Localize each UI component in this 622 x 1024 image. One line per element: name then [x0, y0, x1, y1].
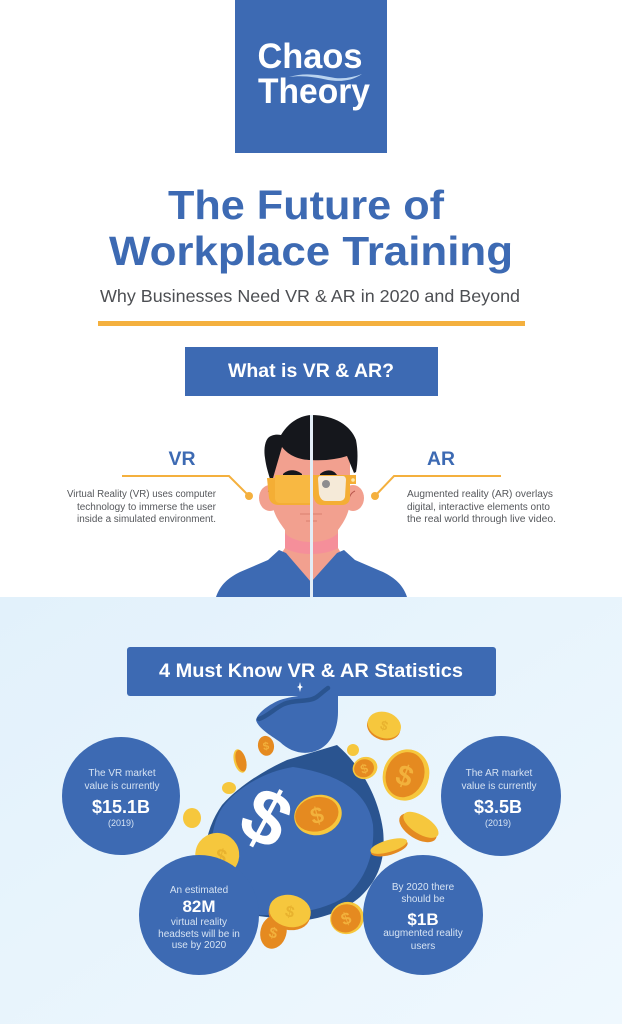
- coins: [183, 707, 443, 952]
- title: Workplace Training: [109, 228, 513, 274]
- coin: $: [339, 908, 354, 929]
- bag knot: [256, 690, 338, 753]
- coin: [290, 789, 346, 841]
- stat: 82M headsets: 82M: [182, 897, 216, 916]
- logo block: [235, 0, 387, 153]
- AR glasses: [311, 475, 356, 505]
- VR explanation: inside a simulated environment.: [77, 514, 216, 525]
- section heading: statistics: 4 Must Know VR & AR Statistics: [159, 661, 463, 682]
- face: [272, 445, 350, 530]
- VR explanation: VR: [168, 449, 196, 470]
- lower statistics background: [0, 597, 622, 1024]
- section heading: statistics: [127, 647, 496, 696]
- coin: $: [267, 924, 280, 943]
- VR headset: [267, 478, 311, 505]
- AR explanation: digital, interactive elements onto: [407, 502, 550, 513]
- money bag illustration: [205, 690, 384, 921]
- VR explanation: technology to immerse the user: [77, 502, 217, 513]
- coin: $: [213, 845, 229, 869]
- coin: $: [307, 801, 327, 829]
- bag tie: [259, 688, 328, 719]
- stat: 82M headsets: An estimated: [170, 885, 228, 896]
- VR explanation: Virtual Reality (VR) uses computer: [67, 489, 217, 500]
- stat: VR market value: [62, 737, 180, 855]
- coin: [266, 891, 314, 934]
- stat: 1B AR users: augmented reality: [383, 928, 463, 939]
- coin: $: [284, 903, 296, 922]
- stat: 82M headsets: use by 2020: [172, 940, 227, 951]
- coin: [369, 835, 409, 860]
- stat: 1B AR users: [363, 855, 483, 975]
- stat: AR market value: [441, 736, 561, 856]
- brows: [283, 470, 302, 476]
- illustration: man with VR and AR glasses: [216, 415, 407, 597]
- hair: [264, 415, 358, 479]
- coin: $: [358, 760, 371, 777]
- coin: [347, 744, 359, 756]
- VR explanation: [67, 449, 253, 525]
- coin behind bag: [222, 782, 236, 794]
- stat: 1B AR users: should be: [401, 894, 445, 905]
- logo block: Theory: [258, 72, 370, 111]
- nose and mouth: [300, 514, 322, 521]
- subtitle: Why Businesses Need VR & AR in 2020 and Beyond: [100, 286, 520, 306]
- coin: [375, 743, 437, 807]
- coin: $: [262, 740, 270, 753]
- AR explanation: AR: [427, 449, 455, 470]
- coin: $: [378, 717, 391, 734]
- stat: AR market value: value is currently: [461, 781, 537, 792]
- sparkle: [297, 682, 303, 692]
- title: The Future of: [168, 182, 444, 228]
- bag dollar sign: $: [227, 768, 306, 866]
- stat: 1B AR users: $1B: [407, 910, 439, 929]
- coin: $: [391, 759, 417, 794]
- stat: VR market value: $15.1B: [92, 797, 150, 817]
- section heading: What is VR & AR: [185, 347, 438, 396]
- stat: AR market value: (2019): [485, 818, 511, 828]
- coin: [257, 912, 290, 952]
- stat: VR market value: (2019): [108, 818, 134, 828]
- stat: VR market value: value is currently: [84, 781, 160, 792]
- stat: AR market value: The AR market: [466, 768, 533, 779]
- coin: [364, 707, 404, 745]
- coin: [256, 735, 276, 757]
- neck: [277, 510, 345, 590]
- coin: [350, 754, 380, 782]
- AR explanation: [371, 449, 556, 525]
- AR explanation: Augmented reality (AR) overlays: [407, 489, 553, 500]
- stat: 82M headsets: [139, 855, 259, 975]
- title divider: [98, 321, 525, 326]
- logo block: Chaos: [258, 37, 362, 76]
- stat: 1B AR users: users: [411, 941, 435, 952]
- coin: [231, 748, 249, 774]
- shirt: [216, 550, 407, 597]
- AR explanation: the real world through live video.: [407, 514, 556, 525]
- stat: VR market value: The VR market: [88, 768, 156, 779]
- coin: [183, 808, 201, 828]
- stat: 82M headsets: headsets will be in: [158, 929, 240, 940]
- stat: AR market value: $3.5B: [474, 797, 522, 817]
- coin: [394, 806, 443, 848]
- title: [109, 182, 513, 274]
- centre split line: [310, 415, 313, 597]
- bag body back: [205, 745, 384, 921]
- bag body front: [212, 767, 373, 915]
- stat: 1B AR users: By 2020 there: [392, 882, 455, 893]
- coin: [190, 828, 244, 882]
- section heading: What is VR & AR: What is VR & AR?: [228, 361, 394, 382]
- stat: 82M headsets: virtual reality: [171, 917, 227, 928]
- coin: [326, 897, 368, 939]
